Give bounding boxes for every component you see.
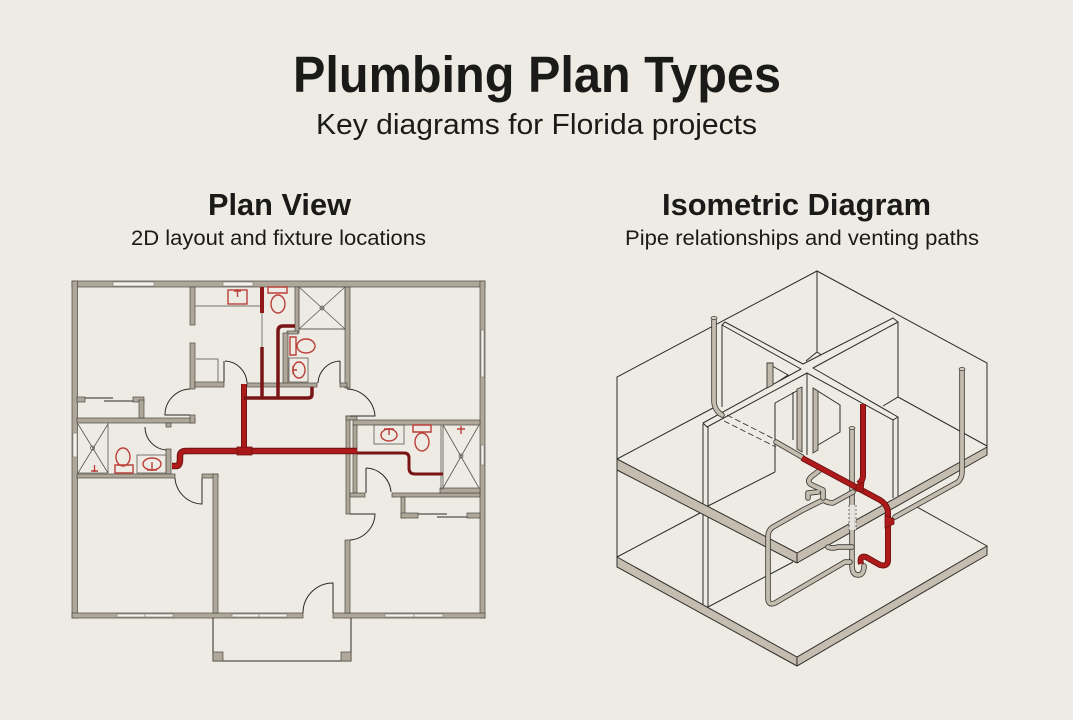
building envelope outline — [617, 271, 987, 557]
windows — [73, 282, 484, 617]
plumbing fixtures: toilets and sinks — [91, 287, 465, 473]
upper floor slab — [617, 447, 987, 563]
red drain and vent pipes — [802, 404, 894, 565]
heading: isometric diagram: Isometric Diagram — [662, 187, 931, 222]
heading: plan view: Plan View — [208, 187, 352, 222]
closets and thin partitions — [85, 306, 467, 517]
dashed concealed pipe — [724, 415, 776, 447]
showers — [77, 287, 479, 488]
panel: floor plan — [72, 281, 485, 661]
panel: isometric diagram — [617, 271, 987, 666]
exterior and interior walls — [72, 281, 485, 618]
red drain pipes — [172, 287, 443, 474]
caption: isometric diagram: Pipe relationships and venting paths — [625, 227, 979, 250]
subtitle: Key diagrams for Florida projects — [316, 109, 757, 141]
grey vent and drain pipes — [711, 316, 965, 604]
doors — [145, 361, 391, 613]
front porch — [213, 618, 351, 661]
lower floor slab — [617, 546, 987, 666]
interior partition walls — [703, 318, 898, 607]
caption: plan view: 2D layout and fixture locations — [131, 227, 426, 250]
title: Plumbing Plan Types — [293, 46, 781, 103]
